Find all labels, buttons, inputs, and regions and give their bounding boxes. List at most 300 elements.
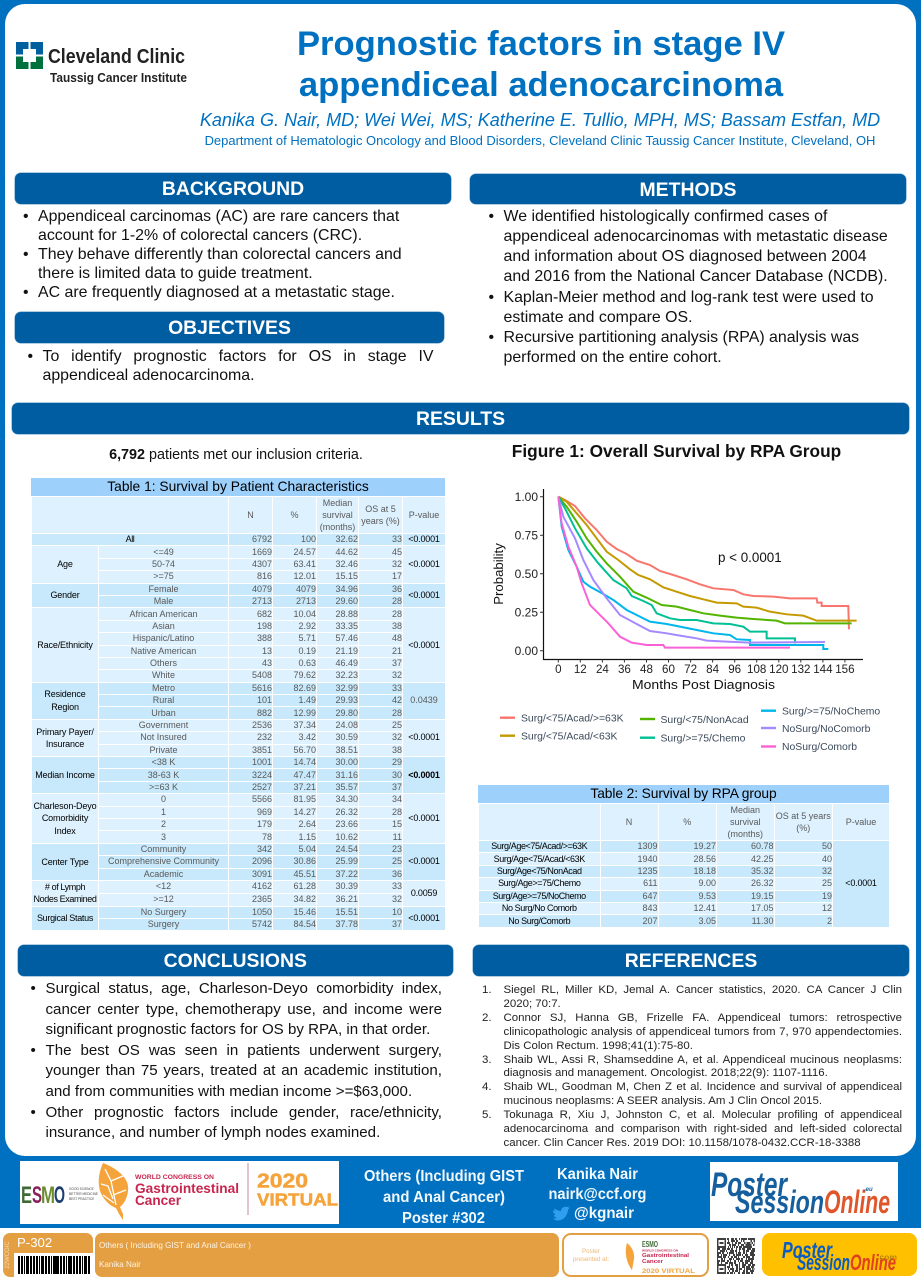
table 1 data: 0.0439 (410, 695, 438, 705)
table 1 data: 46.49 (335, 658, 358, 668)
banner: Poster Session Online logo (710, 1162, 898, 1221)
table 2 data: 50 (822, 841, 832, 851)
poster: • (488, 208, 494, 224)
text: references list: Shaib WL, Goodman M, Chen Z et al. Incidence and survival of appendiceal (504, 1081, 902, 1093)
table 2 data: 18.18 (693, 866, 716, 876)
x axis labels: 24 (596, 663, 609, 676)
ESMO wordmark: E (21, 1182, 32, 1209)
table 2 data: 19 (822, 891, 832, 901)
table 1 data: 15.15 (335, 571, 358, 581)
table 1 data: Not Insured (140, 732, 187, 742)
table 1 (31, 478, 445, 930)
table 1 data: 2536 (252, 720, 272, 730)
table 1 data: 2527 (252, 782, 272, 792)
table 1 data: 37 (392, 782, 402, 792)
footer: session bar (95, 1233, 559, 1277)
table 1 data: 32 (392, 559, 402, 569)
table 2 data: Surg/Age<75/NonAcad (497, 866, 582, 876)
table 1 data: 82.69 (293, 683, 316, 693)
poster: 1. (482, 984, 492, 996)
legend: Surg/>=75/NoChemo (782, 706, 880, 718)
table 2 data: 1940 (637, 854, 658, 864)
table 1 data: 36 (392, 869, 402, 879)
table 2 data: 12 (822, 903, 832, 913)
footer: presented at badge: Gastrointestinal (642, 1253, 690, 1259)
banner: session and poster number: and Anal Cancer) (383, 1189, 505, 1206)
text: references list: mucinous neoplasms: A SEER analysis. Am J Clin Oncol 2015. (504, 1095, 822, 1107)
footer: poster id tab (3, 1233, 93, 1277)
table 1 data: Metro (152, 683, 175, 693)
table 1 data: Rural (153, 695, 174, 705)
table 1 data: 0.0059 (411, 888, 437, 898)
footer: presented at badge: Poster (582, 1248, 600, 1255)
ESMO wordmark: M (41, 1182, 55, 1209)
table 1 data: 32.62 (335, 534, 358, 544)
text: conclusions bullets: younger than 75 years, treated at an academic institution, (46, 1062, 442, 1079)
table 1 data: Private (149, 745, 178, 755)
table 2 data: 9.53 (698, 891, 716, 901)
table 1 data: 15 (392, 819, 402, 829)
table 2 data: Surg/Age>=75/NoChemo (493, 891, 586, 901)
table 1 data: <0.0001 (408, 640, 440, 650)
table 1 data: 28 (392, 807, 402, 817)
table 1 data: 0.19 (298, 646, 316, 656)
table 2 data: <0.0001 (845, 878, 877, 888)
table 2 data: Surg/Age<75/Acad/<63K (494, 854, 585, 864)
table 1 data: Residence Region (44, 689, 86, 712)
table 1 data: % (290, 510, 298, 520)
table 1 data: 50-74 (152, 559, 175, 569)
y axis labels: 0.75 (515, 528, 538, 542)
table 1 data: Charleson-Deyo Comorbidity Index (34, 801, 96, 836)
poster: • (23, 284, 29, 300)
table 1 data: 15.51 (335, 907, 358, 917)
text: background bullets: Appendiceal carcinomas (AC) are rare cancers that (38, 208, 399, 224)
table 1 data: <0.0001 (408, 534, 440, 544)
table 1 data: 10.04 (293, 609, 316, 619)
y axis title: Probability (491, 543, 506, 605)
table 1 data: 35.57 (335, 782, 358, 792)
table 1 data: 2.92 (298, 621, 316, 631)
text: methods bullets (488, 208, 888, 366)
table 2 data: 40 (822, 854, 832, 864)
table 1 data: <38 K (152, 757, 175, 767)
table 2 data: 60.78 (751, 841, 774, 851)
banner: contact details (548, 1166, 646, 1222)
table 1 data: 21 (392, 646, 402, 656)
table 2 title (478, 785, 889, 803)
heading: references (473, 945, 909, 976)
ESMO wordmark: S (32, 1182, 42, 1209)
text: references list: diagnosis and management. Oncologist. 2018;22(9): 1107-1116. (504, 1067, 828, 1079)
icon: twitter bird (553, 1206, 570, 1220)
table 1 data: 4162 (252, 881, 272, 891)
x axis labels: 108 (747, 663, 766, 676)
table 1 data: Male (154, 596, 173, 606)
text: objectives bullet: To identify prognostic factors for OS in stage IV (42, 348, 434, 364)
text: references list: 2020; 70:7. (504, 998, 561, 1010)
poster: 2. (482, 1012, 492, 1024)
table 1 data: 13 (262, 646, 272, 656)
table 1 data: Hispanic/Latino (133, 633, 194, 643)
heading: methods (470, 174, 906, 204)
table 1 data: Academic (144, 869, 183, 879)
text: inclusion count: 6,792 patients met our inclusion criteria. (109, 446, 363, 462)
text: methods bullets: and information about OS diagnosed between 2004 (504, 248, 867, 264)
table 1 data: 3.42 (298, 732, 316, 742)
table 2 data: 207 (642, 916, 658, 926)
table 1 data: 45 (392, 547, 402, 557)
table 2 data: 1309 (637, 841, 658, 851)
table 1 data: 5408 (252, 670, 272, 680)
session name: Others ( Including GIST and Anal Cancer ) (99, 1241, 251, 1250)
table 1 data: 682 (257, 609, 272, 619)
table 1 data: <0.0001 (408, 913, 440, 923)
table 1 data: 342 (257, 844, 272, 854)
table 1 data: All (126, 534, 134, 544)
table 2 data: Surg/Age>=75/Chemo (498, 878, 580, 888)
table 1 data: 32.99 (335, 683, 358, 693)
table 1 data: Age (57, 559, 73, 569)
p value: p < 0.0001 (718, 550, 782, 565)
table 1 data: 1050 (252, 907, 272, 917)
banner: conference logo: WORLD CONGRESS ON (135, 1175, 214, 1181)
table 1 data: 969 (257, 807, 272, 817)
table 1 data: 32 (392, 670, 402, 680)
banner: conference logo: Gastrointestinal (135, 1180, 239, 1196)
legend: Surg/<75/Acad/>=63K (521, 714, 624, 725)
table 1 data: 0 (161, 794, 166, 804)
table 2 data: 611 (643, 878, 658, 888)
heading: results (12, 403, 909, 434)
poster: • (28, 348, 33, 364)
table 1 data: Median survival (months) (320, 498, 355, 532)
text: references list (482, 984, 902, 1149)
table 2 data: 12.41 (693, 903, 716, 913)
banner: session and poster number (364, 1168, 524, 1227)
x axis labels: 60 (662, 663, 675, 676)
table 2 data: 28.56 (693, 854, 716, 864)
table 2 data: 843 (642, 903, 658, 913)
banner: session and poster number: Poster #302 (402, 1210, 485, 1227)
table 2 data: 3.05 (698, 916, 716, 926)
table 1 data: 1.15 (298, 832, 316, 842)
table 2 data: 32 (822, 866, 832, 876)
chart: Kaplan-Meier survival curves (491, 489, 880, 753)
table 2 data: 26.32 (751, 878, 774, 888)
table 1 data: Race/Ethnicity (37, 640, 93, 650)
table 1 data: 37.22 (335, 869, 358, 879)
x axis labels: 132 (791, 663, 810, 676)
table 2 data: N (626, 817, 632, 827)
table 1 data: 2.64 (298, 819, 316, 829)
table 2 data: 647 (642, 891, 658, 901)
text: background bullets: account for 1-2% of colorectal cancers (CRC). (38, 226, 362, 244)
table 1 data: <0.0001 (408, 770, 440, 780)
table 1 data: 5616 (252, 683, 272, 693)
table 1 data: 882 (257, 708, 272, 718)
text: objectives bullet: appendiceal adenocarcinoma. (42, 366, 255, 384)
poster: • (23, 246, 29, 262)
banner: Poster Session Online logo: Poster (711, 1166, 788, 1204)
table 1 data: 37 (392, 919, 402, 929)
table 1 data: 1 (161, 807, 166, 817)
table 1 data: 36 (392, 584, 402, 594)
text: methods bullets: appendiceal adenocarcinomas with metastatic disease (504, 228, 888, 244)
table 1 data: 25 (392, 856, 402, 866)
table 1 data: 28 (392, 708, 402, 718)
x axis labels: 156 (835, 663, 855, 676)
heading: objectives: OBJECTIVES (168, 317, 291, 339)
text: conclusions bullets: Surgical status, age, Charleson-Deyo comorbidity index, (46, 980, 442, 997)
table 1 data: 32 (392, 732, 402, 742)
table 1 data: <0.0001 (408, 559, 440, 569)
table 2 data: No Surg/Comorb (508, 916, 570, 926)
logo: Cleveland Clinic (16, 42, 187, 85)
table 1 data: 21.19 (335, 646, 358, 656)
text: objectives bullet (28, 348, 434, 384)
table 1 data: 63.41 (293, 559, 316, 569)
table 1 data: 32 (392, 894, 402, 904)
table 1 data: 4079 (252, 584, 272, 594)
x axis labels: 120 (769, 663, 788, 676)
table 1 data: >=12 (153, 894, 174, 904)
table 1 data (32, 497, 445, 930)
table 1 data: 26.32 (335, 807, 358, 817)
text: methods bullets: and 2016 from the National Cancer Database (NCDB). (504, 268, 888, 284)
table 1 data: 2096 (252, 856, 272, 866)
title: appendiceal adenocarcinoma (299, 66, 783, 104)
legend: Surg/<75/Acad/<63K (521, 732, 618, 743)
table 1 data: Center Type (41, 857, 89, 867)
y axis labels: 0.00 (515, 644, 538, 658)
table 1 data: <0.0001 (408, 732, 440, 742)
table 2 data: Surg/Age<75/Acad/>=63K (491, 841, 587, 851)
text: methods bullets: Kaplan-Meier method and log-rank test were used to (504, 288, 874, 306)
table 1 data: 56.70 (293, 745, 316, 755)
table 1 data: >=63 K (149, 782, 178, 792)
table 1 data: 28.88 (335, 609, 358, 619)
table 2 data: No Surg/No Comorb (502, 903, 577, 913)
heading: methods: METHODS (640, 179, 736, 201)
poster number: P-302 (17, 1235, 52, 1250)
table 1 data: 36.21 (335, 894, 358, 904)
legend (500, 706, 880, 753)
heading: references: REFERENCES (625, 950, 757, 972)
table 1 data: <0.0001 (408, 856, 440, 866)
table 1 data: 34 (392, 794, 402, 804)
table 2 data: 35.32 (751, 866, 774, 876)
table 1 data: 5566 (252, 794, 272, 804)
poster: • (30, 1042, 36, 1059)
table 2 (478, 785, 889, 927)
poster: • (30, 980, 36, 997)
heading: results: RESULTS (416, 408, 505, 430)
table 1 data: Gender (50, 590, 80, 600)
table 1 data: 12.01 (293, 571, 316, 581)
heading: conclusions: CONCLUSIONS (164, 950, 307, 972)
text: references list: adenocarcinoma and comparison with right-sided and left-sided colorectal (504, 1123, 902, 1135)
table 2 data: 1235 (637, 866, 658, 876)
heading: background (15, 173, 451, 204)
poster: 4. (482, 1081, 492, 1093)
table 1 data: 79.62 (293, 670, 316, 680)
table 1 data: African American (129, 609, 198, 619)
poster: 3. (482, 1054, 492, 1066)
table 1 data: Primary Payer/ Insurance (36, 727, 94, 749)
poster: • (30, 1104, 36, 1121)
table 1 data: 29.93 (335, 695, 358, 705)
icon: barcode (14, 1253, 93, 1277)
table 2 data: 11.30 (752, 916, 774, 926)
table 1 data: 38-63 K (148, 770, 179, 780)
table 1 data: 2365 (252, 894, 272, 904)
table 1 data: 33 (392, 534, 402, 544)
survival curves (558, 497, 857, 649)
affiliation: Department of Hematologic Oncology and Blood Disorders, Cleveland Clinic Taussig Cancer Institute, Cleveland, OH (205, 133, 875, 148)
footer: presented at badge: WORLD CONGRESS ON (642, 1248, 678, 1252)
table 1 data: 38 (392, 621, 402, 631)
table 1 data: 30.59 (335, 732, 358, 742)
table 1 data: 3 (161, 832, 166, 842)
table 1 data: 23 (392, 844, 402, 854)
text: references list: Shaib WL, Assi R, Shamseddine A, et al. Appendiceal mucinous neoplasms: (504, 1054, 902, 1066)
text: references list: Siegel RL, Miller KD, Jemal A. Cancer statistics, 2020. CA Cancer J Clin (504, 984, 902, 996)
table 1 data: 32.46 (335, 559, 358, 569)
table 1 data: <=49 (153, 547, 174, 557)
footer: presented at badge: ESMO (642, 1240, 658, 1249)
text: background bullets: there is limited data to guide treatment. (38, 264, 313, 282)
table 1 data: 4079 (296, 584, 316, 594)
table 1 data: 61.28 (293, 881, 316, 891)
table 1 data: Female (148, 584, 178, 594)
table 1 data: 2713 (296, 596, 316, 606)
legend: NoSurg/NoComorb (782, 724, 871, 735)
table 1 data: 14.74 (293, 757, 316, 767)
table 1 data: 101 (257, 695, 272, 705)
text: background bullets: They behave differently than colorectal cancers and (38, 246, 402, 262)
figure 1 title: Figure 1: Overall Survival by RPA Group (512, 441, 841, 461)
table 1 data: 24.57 (293, 547, 316, 557)
poster: • (23, 208, 29, 224)
table 1 data: Surgery (148, 919, 179, 929)
banner: conference logo: 2020 (257, 1170, 308, 1192)
banner: contact details: Kanika Nair (557, 1166, 638, 1183)
text: conclusions bullets: The best OS was seen in patients underwent surgery, (46, 1042, 442, 1059)
table 1 data: Native American (131, 646, 196, 656)
text: methods bullets: Recursive partitioning analysis (RPA) analysis was (504, 328, 859, 346)
text: references list: Dis Colon Rectum. 1998;41(1):75-80. (504, 1040, 693, 1052)
authors: Kanika G. Nair, MD; Wei Wei, MS; Katherine E. Tullio, MPH, MS; Bassam Estfan, MD (200, 110, 880, 130)
table 1 data: 37.78 (335, 919, 358, 929)
table 2 data: P-value (846, 817, 876, 827)
poster: • (488, 288, 494, 306)
table 1 data: 179 (257, 819, 272, 829)
logo: Cleveland Clinic: Taussig Cancer Institute (50, 71, 187, 85)
table 1 data: 28 (392, 596, 402, 606)
table 1 data: 33 (392, 683, 402, 693)
table 1 data: 25.99 (335, 856, 358, 866)
table 1 data: 37.21 (293, 782, 316, 792)
table 1 data: 5.04 (298, 844, 316, 854)
text: conclusions bullets: significant prognostic factors for OS by RPA, in that order. (46, 1021, 430, 1038)
footer: Poster Session Online logo on yellow: Session (797, 1250, 850, 1275)
vertical code: 22WCGIC (5, 1241, 11, 1269)
table 1 data: 32.23 (335, 670, 358, 680)
table 2 data: OS at 5 years (%) (776, 811, 831, 833)
table 1 data: 33 (392, 881, 402, 891)
table 1 data: 0.63 (298, 658, 316, 668)
table 1 data: 48 (392, 633, 402, 643)
text: background bullets: AC are frequently diagnosed at a metastatic stage. (38, 284, 395, 300)
table 1 data: 78 (262, 832, 272, 842)
table 2 data (479, 804, 889, 927)
table 1 data: 2 (161, 819, 166, 829)
table 1 data: N (247, 510, 254, 520)
banner: contact details: @kgnair (574, 1205, 634, 1222)
text: conclusions bullets: Other prognostic factors include gender, race/ethnicity, (46, 1104, 442, 1121)
table 1 data: 34.30 (335, 794, 358, 804)
text: conclusions bullets (30, 980, 442, 1141)
table 2 title: Table 2: Survival by RPA group (590, 786, 777, 801)
x axis labels: 36 (618, 663, 631, 676)
text: references list: Connor SJ, Hanna GB, Frizelle FA. Appendiceal tumors: retrospective (504, 1012, 902, 1024)
leaf emblem (99, 1163, 128, 1220)
table 1 data: 24.54 (335, 844, 358, 854)
text: conclusions bullets: cancer center type, chemotherapy use, and income were (46, 1001, 442, 1018)
table 1 data: 100 (301, 534, 316, 544)
footer: presented at badge (562, 1233, 709, 1277)
table 1 data: 31.16 (335, 770, 358, 780)
footer: presented at badge: 2020 VIRTUAL (642, 1268, 695, 1275)
x axis labels (555, 663, 855, 676)
table 1 data: 816 (257, 571, 272, 581)
table 1 data: 3091 (252, 869, 272, 879)
axes (540, 489, 863, 662)
table 1 data: <12 (156, 881, 171, 891)
table 2 data: Median survival (months) (727, 805, 763, 839)
table 1 data: 12.99 (293, 708, 316, 718)
ESMO wordmark (21, 1182, 98, 1209)
table 1 data: 34.96 (335, 584, 358, 594)
table 1 data: P-value (409, 510, 439, 520)
text: conclusions bullets: insurance, and number of lymph nodes examined. (46, 1124, 380, 1141)
legend: Surg/<75/NonAcad (660, 715, 749, 726)
banner: conference logo (20, 1161, 339, 1224)
text: methods bullets: We identified histologically confirmed cases of (504, 208, 827, 224)
table 1 data: 25 (392, 720, 402, 730)
table 1 data: 5742 (252, 919, 272, 929)
x axis labels: 72 (684, 663, 697, 676)
table 2 data: 42.25 (751, 854, 774, 864)
x axis labels: 48 (640, 663, 653, 676)
text: references list: clinicopathologic analysis of appendiceal tumors from 7, 970 appendectomies. (504, 1026, 902, 1038)
table 1 data: Community (141, 844, 186, 854)
x axis labels: 96 (728, 663, 741, 676)
y axis labels: 0.50 (515, 567, 538, 581)
y axis labels (515, 490, 538, 658)
table 1 data: 81.95 (293, 794, 316, 804)
table 1 title (31, 478, 445, 496)
table 1 data: 3224 (252, 770, 272, 780)
table 1 data: # of Lymph Nodes Examined (34, 882, 96, 904)
heading: conclusions (18, 945, 453, 976)
table 1 data: 24.08 (335, 720, 358, 730)
ESMO wordmark: BEST PRACTICE (69, 1197, 94, 1201)
table 1 data: <0.0001 (408, 813, 440, 823)
heading: background: BACKGROUND (162, 178, 304, 200)
heading: objectives (15, 312, 444, 343)
